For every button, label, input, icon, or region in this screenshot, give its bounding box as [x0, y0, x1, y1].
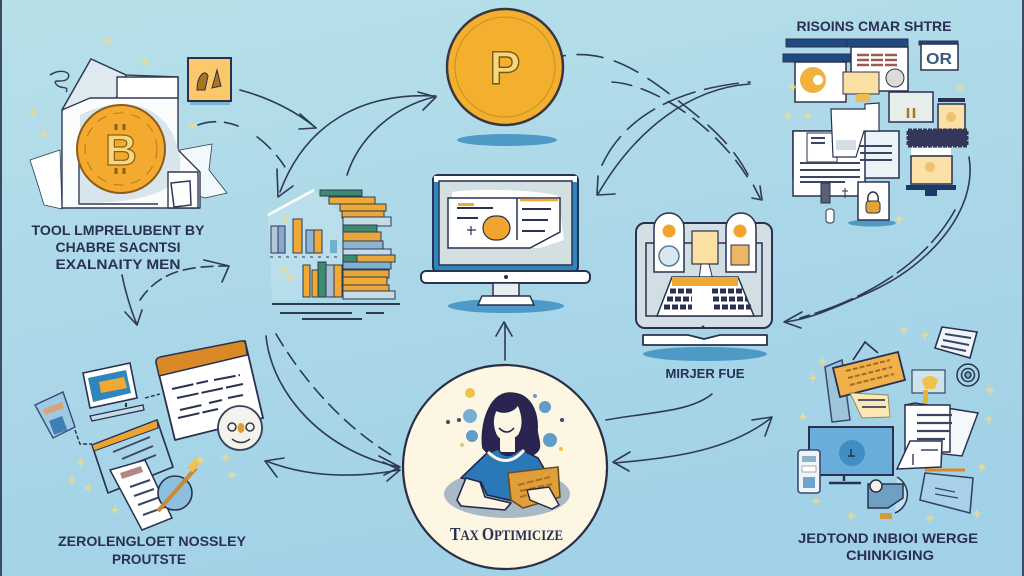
- arrow: circle up to monitor: [496, 322, 512, 360]
- floating icons: [446, 388, 564, 451]
- icon: blue monitor: [809, 427, 893, 483]
- icon: camera: [868, 477, 907, 519]
- monitor: [889, 92, 933, 122]
- header bars: [783, 39, 958, 62]
- keyboard block: [908, 130, 967, 146]
- label: upper left: [32, 222, 205, 272]
- icon: small monitor: [83, 363, 144, 421]
- label: upper left: CHABRE SACNTSI: [56, 239, 180, 255]
- card: list window: [851, 47, 908, 91]
- card: OR: [921, 44, 958, 70]
- label: upper left: EXALNAITY MEN: [56, 256, 180, 272]
- icon: browser window: [156, 341, 263, 440]
- icon: desk lamp: [912, 370, 945, 407]
- bar chart: [271, 219, 342, 297]
- panel: books and bar chart: [268, 190, 400, 319]
- arrow: double headed lower left to circle: [265, 458, 400, 481]
- label: lower left: ZEROLENGLOET NOSSLEY: [58, 533, 247, 549]
- panel: bitcoin document, upper left: [28, 36, 231, 209]
- panel: top bitcoin coin: [447, 9, 563, 146]
- label: lower right: CHINKIGING: [846, 547, 934, 563]
- flow arrows: [122, 55, 970, 481]
- arrow: arc to monitor right: [597, 84, 750, 195]
- icon: stacked paper: [897, 403, 978, 470]
- right pill: [726, 213, 756, 272]
- arrow: circle to laptop: [606, 394, 712, 420]
- label: lower left: PROUTSTE: [112, 551, 186, 567]
- icon: envelope: [920, 473, 973, 513]
- icon: framed picture badge: [188, 58, 231, 105]
- arrow: dashed label to chart: [140, 260, 229, 300]
- panel: laptop with calculator: [636, 213, 772, 361]
- label: Tax Optimicize: TAX OPTIMICIZE: [450, 524, 563, 544]
- icon: hanging tag: [853, 342, 878, 360]
- icon: face badge: [218, 406, 262, 450]
- arrow: dashed crossing to laptop: [612, 82, 752, 185]
- person: [457, 393, 549, 510]
- arrow: long arc to chart: [277, 96, 436, 197]
- arrow: dashed top coin to laptop: [540, 55, 762, 200]
- label: lower right: JEDTOND INBIOI WERGE: [798, 530, 978, 546]
- book: [508, 467, 560, 509]
- arrow: dashed chart to center circle: [276, 334, 396, 458]
- sparkles: [28, 36, 197, 139]
- centre card: [692, 231, 718, 280]
- icon: paper sheet: [110, 460, 172, 530]
- stapler tool: [821, 183, 848, 223]
- left pill: [654, 213, 684, 272]
- tall sheet: [831, 103, 879, 157]
- crumpled paper: [30, 59, 227, 209]
- icon: bitcoin coin: [77, 105, 165, 193]
- card: gold swirl: [795, 62, 846, 102]
- label: upper left: TOOL LMPRELUBENT BY: [32, 222, 205, 238]
- label: cluster heading: RISOINS CMAR SHTRE: [796, 18, 952, 34]
- shelf: [272, 304, 400, 319]
- folder behind note: [825, 360, 850, 422]
- icon: scribble: [50, 71, 69, 92]
- icon: spiral disc: [957, 364, 979, 386]
- label: lower right: [798, 530, 978, 563]
- panel: tax optimizer circle: [403, 365, 607, 569]
- laptop yellow: [906, 148, 956, 196]
- arrow: right cluster to laptop: [784, 157, 970, 328]
- panel: desktop monitor: [421, 175, 590, 313]
- sparkles: [67, 453, 237, 515]
- icon: phone: [798, 450, 820, 493]
- arrow: dashed coin to chart: [198, 122, 287, 170]
- label: lower left: [58, 533, 247, 567]
- icon: orange note: [833, 352, 905, 397]
- icon: bitcoin coin: B: [105, 126, 137, 175]
- icon: small tag on document: [171, 181, 191, 207]
- icon: top document: [935, 327, 977, 358]
- panel: document cluster, upper right: [783, 18, 967, 226]
- gold tall card: [938, 98, 965, 130]
- arrow: label down to lower left: [122, 275, 142, 325]
- panel: top bitcoin coin: P: [490, 42, 520, 94]
- sparkles: [798, 325, 995, 523]
- icon: folder document: [92, 420, 173, 493]
- card: OR: OR: [926, 51, 952, 68]
- icon: cream note: [850, 393, 890, 418]
- arrow: arc up to top coin: [347, 92, 436, 175]
- screen document: [448, 190, 564, 248]
- panel: web tools, lower left: [35, 341, 263, 530]
- desk shadow: [444, 470, 570, 518]
- icon: lens and brush: [158, 459, 199, 511]
- small yellow screen: [843, 72, 879, 102]
- lock card: [848, 182, 896, 226]
- icon: small device: [35, 392, 75, 438]
- arrow: chart to center circle: [266, 336, 400, 475]
- keyboard: [657, 277, 754, 316]
- panel: paperwork cluster, lower right: [798, 325, 995, 523]
- icon: connector lines: [75, 394, 160, 444]
- arrow: arc dashed to upper right: [602, 82, 750, 165]
- window paper: [793, 131, 899, 196]
- arrow: badge to chart: [240, 90, 316, 129]
- stack of books: [320, 190, 395, 299]
- arrow: double headed circle to lower right: [613, 417, 772, 471]
- label: laptop: MIRJER FUE: [666, 366, 745, 381]
